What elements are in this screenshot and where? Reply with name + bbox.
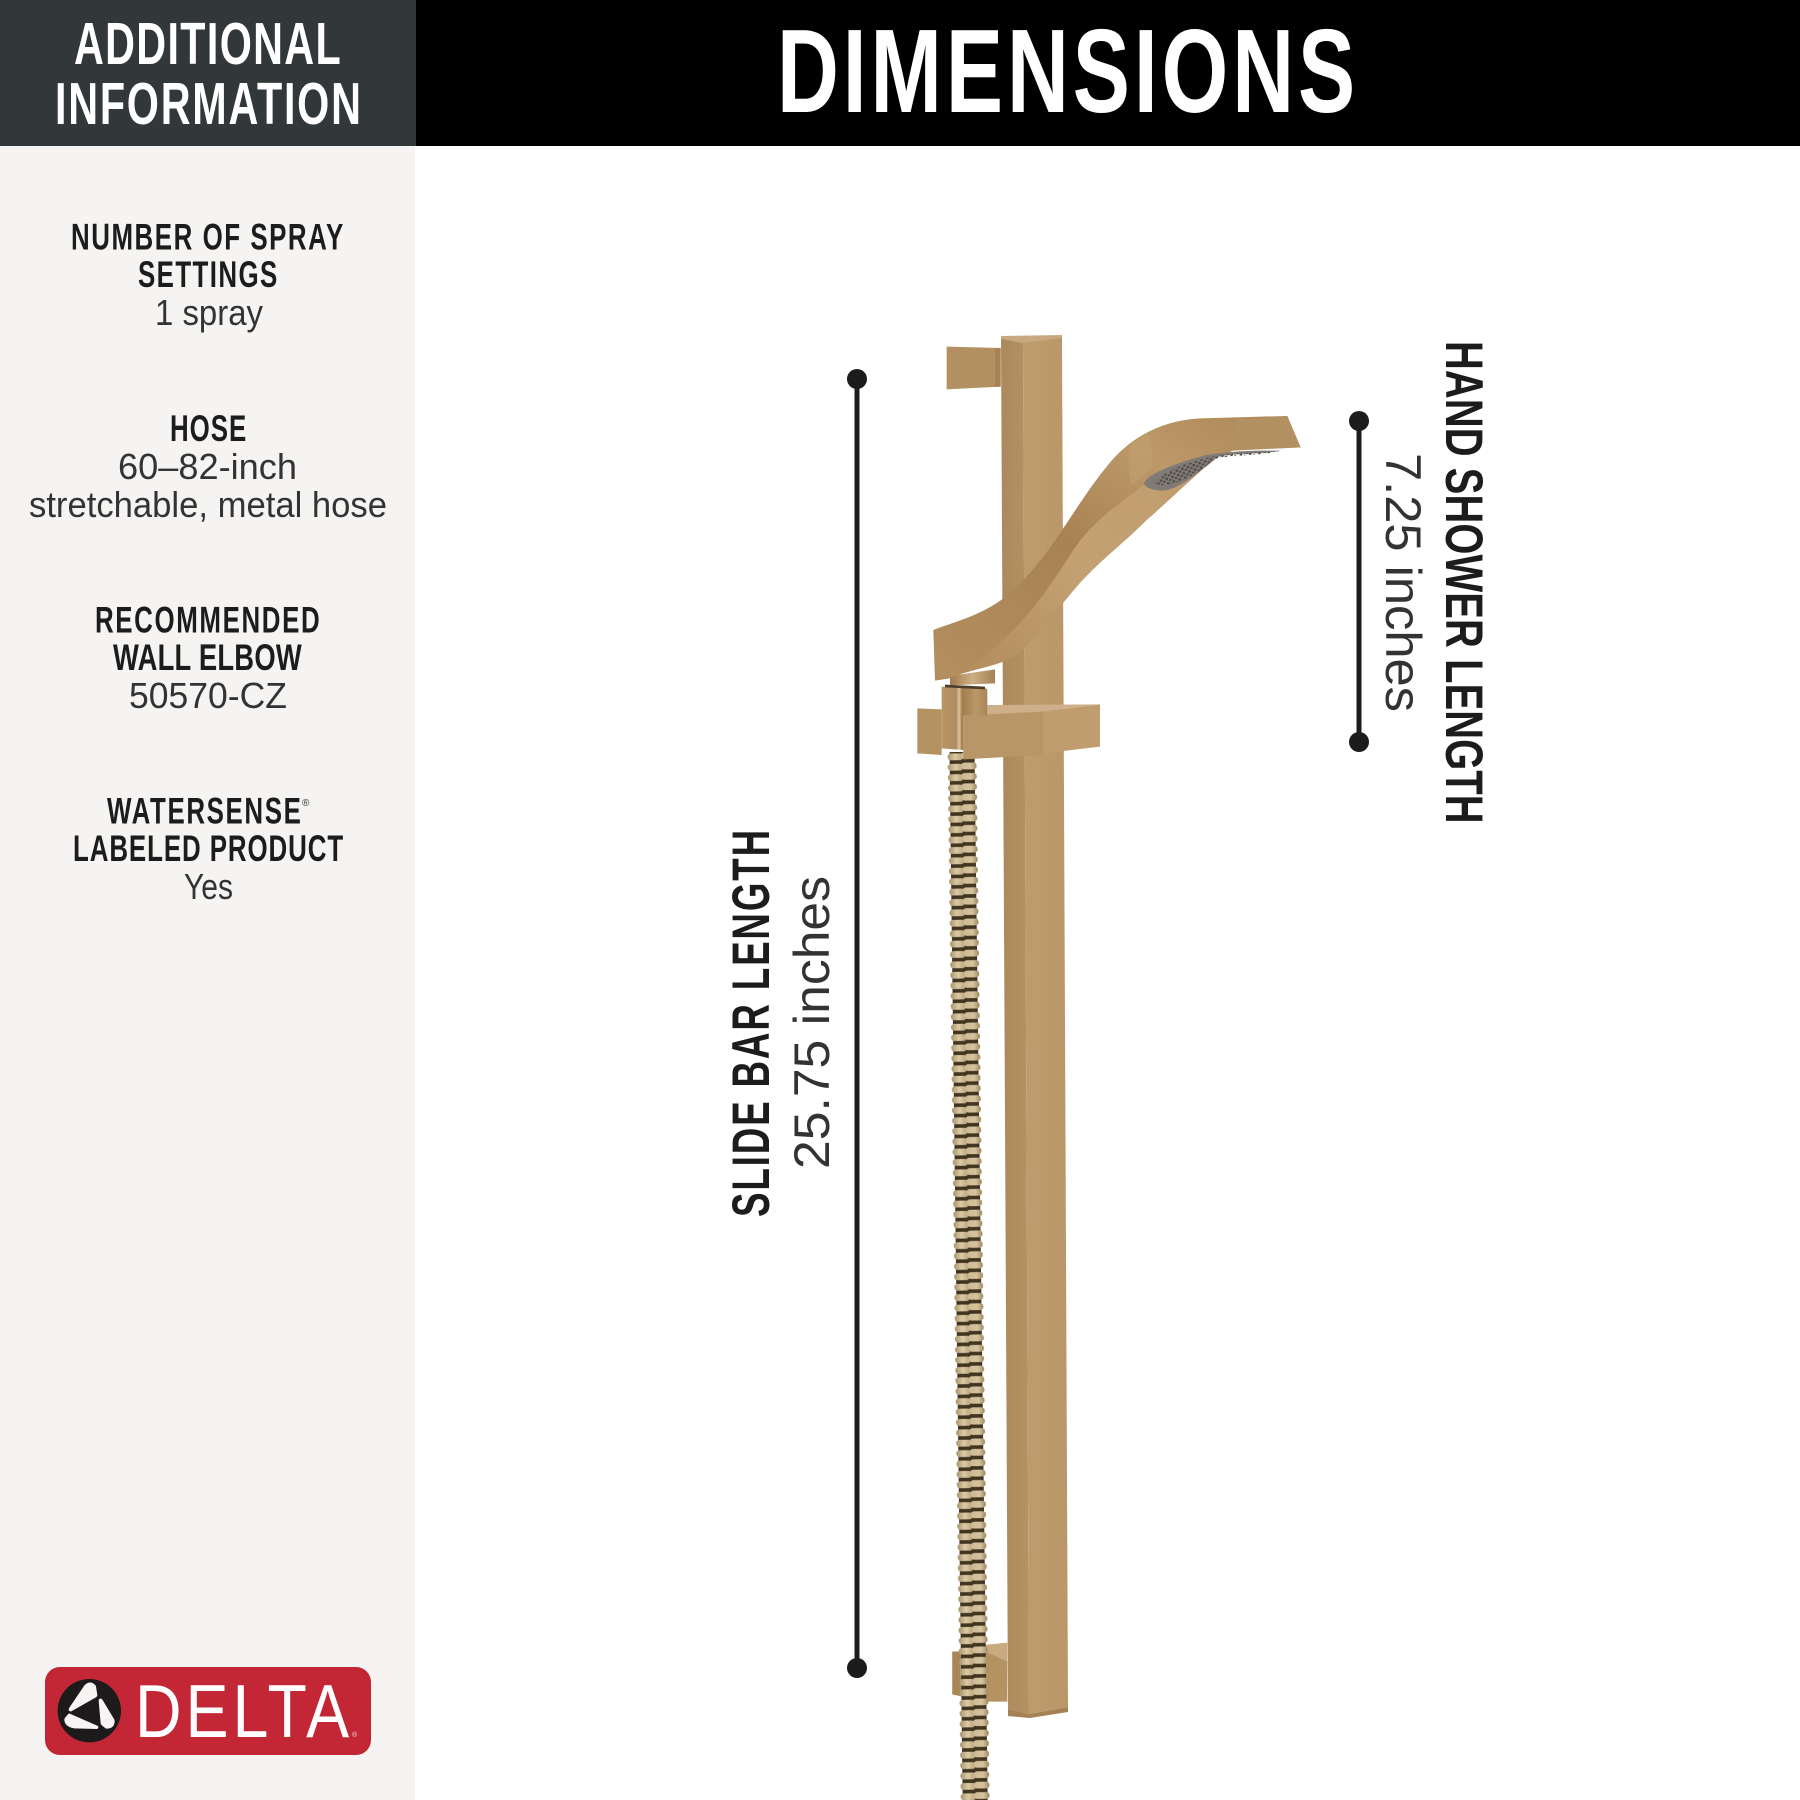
spec: number of spray settings	[71, 216, 343, 333]
spec: hose: HOSE	[170, 407, 246, 449]
bottom wall bracket	[952, 1643, 1007, 1702]
hand shower length label: HAND SHOWER LENGTH	[1435, 341, 1493, 824]
slide bar dimension line	[847, 369, 867, 1678]
delta logo	[45, 1667, 371, 1755]
right block	[1043, 704, 1100, 753]
header: additional information: INFORMATION	[55, 71, 361, 137]
head body	[933, 416, 1301, 681]
spec: watersense labeled product: LABELED PRODUCT	[73, 827, 344, 869]
spec: number of spray settings: 1 spray	[155, 292, 263, 333]
spec: number of spray settings: NUMBER OF SPRAY	[71, 216, 343, 258]
hand shower dimension line	[1349, 411, 1369, 752]
head highlight	[1128, 433, 1152, 485]
tip face	[1233, 416, 1301, 450]
hand shower head	[933, 416, 1301, 681]
spec: recommended wall elbow	[95, 599, 320, 716]
spec: watersense labeled product: WATERSENSE	[107, 790, 301, 832]
sidebar background	[0, 0, 415, 1800]
slide bar length label: 25.75 inches	[784, 876, 840, 1169]
header: dimensions banner	[416, 0, 1800, 146]
delta logo: ®	[352, 1731, 358, 1739]
hand shower length label: 7.25 inches	[1375, 453, 1431, 712]
spec: hose: 60–82-inch	[118, 446, 297, 487]
header: dimensions banner: DIMENSIONS	[777, 4, 1355, 137]
left clamp	[917, 708, 942, 755]
swivel neck	[950, 669, 995, 685]
spec: number of spray settings: SETTINGS	[138, 253, 277, 295]
spec: hose: stretchable, metal hose	[29, 484, 387, 525]
spec: hose	[29, 407, 387, 525]
slide bar length label	[721, 830, 840, 1217]
swivel collar	[942, 687, 987, 750]
header: additional information: ADDITIONAL	[74, 11, 341, 77]
slide bar length label: SLIDE BAR LENGTH	[721, 830, 781, 1217]
slider block and swivel	[917, 669, 1100, 759]
hand shower length label	[1375, 341, 1493, 824]
spec: recommended wall elbow: 50570-CZ	[129, 675, 287, 716]
spec: watersense labeled product: ®	[302, 798, 310, 809]
top wall bracket	[947, 347, 1001, 389]
spec: recommended wall elbow: RECOMMENDED	[95, 599, 320, 641]
lower face	[948, 457, 1217, 679]
slide bar	[1001, 335, 1068, 1718]
delta logo: DELTA	[135, 1669, 349, 1753]
spec: watersense labeled product	[73, 790, 344, 907]
spray plate	[1144, 451, 1282, 491]
spec: recommended wall elbow: WALL ELBOW	[113, 637, 302, 678]
product: slide bar with hand shower	[917, 335, 1301, 1800]
spec: watersense labeled product: Yes	[184, 866, 233, 907]
top plate	[987, 704, 1100, 715]
header: additional information	[0, 0, 416, 146]
front block	[963, 712, 1043, 759]
flexible metal hose	[948, 752, 990, 1800]
